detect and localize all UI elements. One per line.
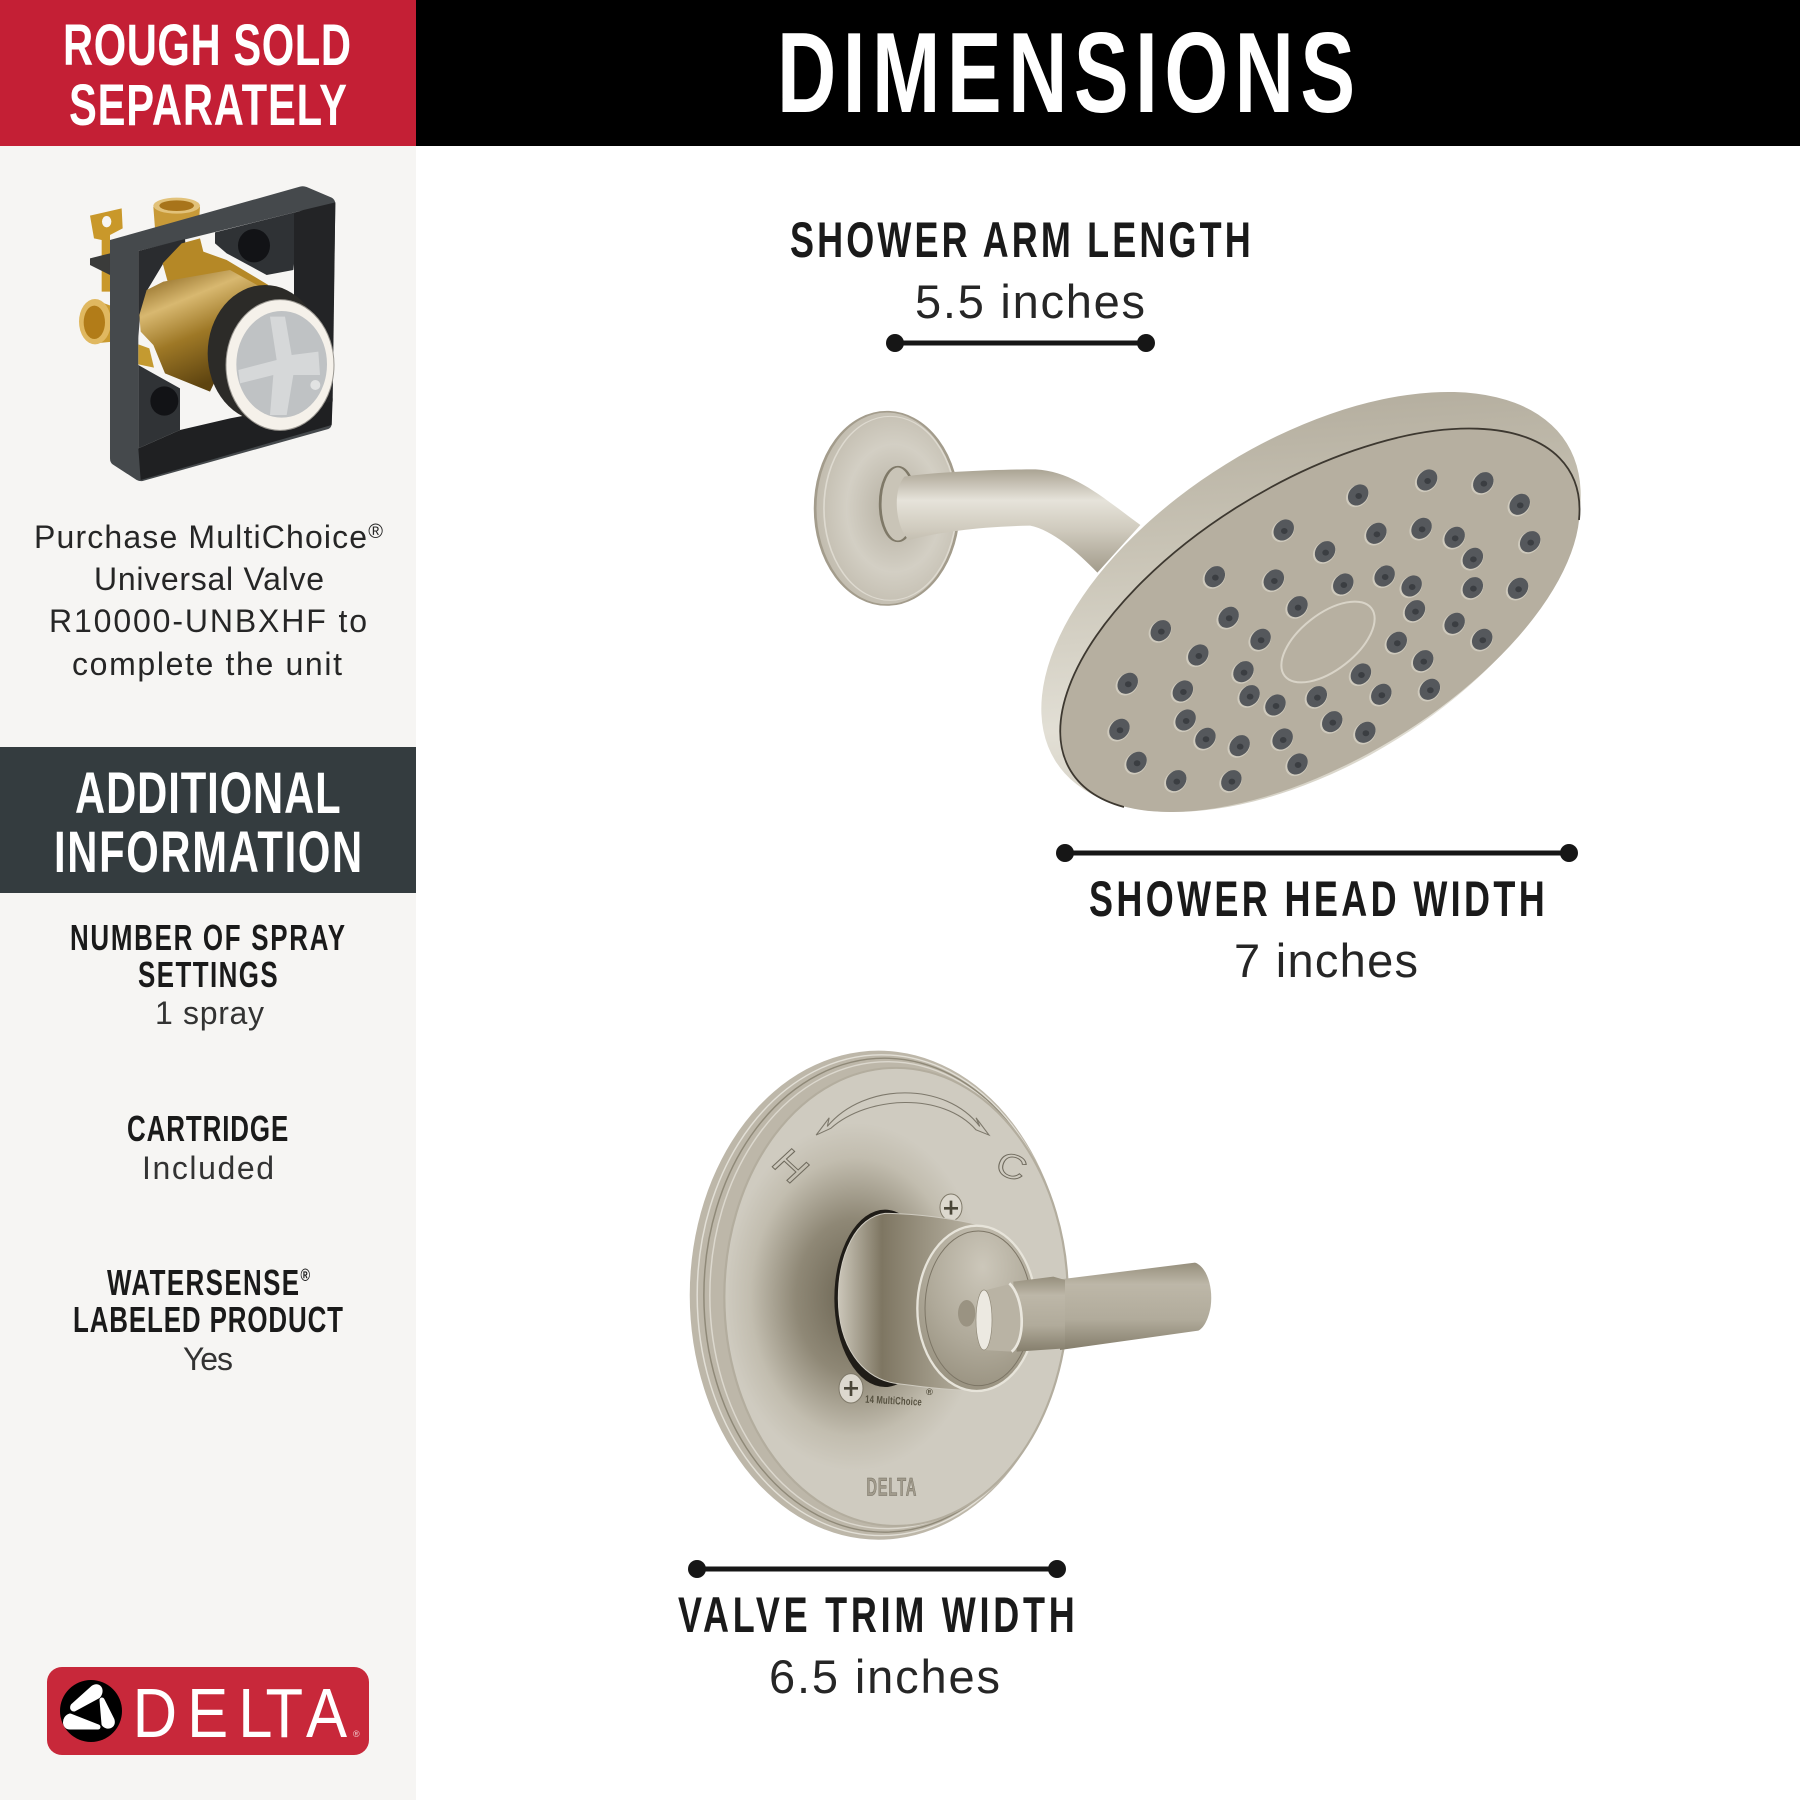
- spec: watersense: Yes: [183, 1341, 233, 1377]
- banner: rough sold separately: [0, 0, 416, 146]
- text: purchase multichoice note: Universal Valve: [94, 561, 324, 597]
- top screw: [940, 1194, 962, 1221]
- upper mounting block: [215, 211, 300, 275]
- spec: watersense: WATERSENSE: [107, 1263, 299, 1303]
- banner: additional information: INFORMATION: [54, 819, 362, 885]
- right wall: [294, 202, 335, 408]
- banner: additional information: [0, 747, 416, 893]
- bottom wall: [138, 398, 333, 480]
- title banner: dimensions: [416, 0, 1800, 146]
- cold mark: C: [991, 1144, 1033, 1189]
- spray nozzles: [1105, 468, 1543, 794]
- hub cylinder: [838, 1213, 983, 1391]
- spec: spray settings: 1 spray: [155, 995, 264, 1031]
- text: purchase multichoice note: [34, 519, 383, 682]
- spec: watersense: LABELED PRODUCT: [73, 1300, 343, 1340]
- handle shadow: [958, 1300, 975, 1327]
- measure line: [688, 1560, 1066, 1578]
- banner: additional information: ADDITIONAL: [75, 760, 341, 826]
- mounting bracket: [90, 208, 123, 292]
- plate rim: [690, 1051, 1067, 1540]
- lower brass: [138, 344, 154, 368]
- banner: rough sold separately: ROUGH SOLD: [63, 12, 351, 78]
- face edge line: [1060, 429, 1580, 807]
- measure line: [886, 334, 1155, 352]
- arm tube: [897, 469, 1140, 573]
- top port: [153, 207, 200, 242]
- dark cartridge collar: [208, 285, 322, 422]
- image: rough valve: [79, 186, 335, 481]
- frame opening: [138, 211, 300, 448]
- brass body: [139, 270, 260, 392]
- dimension: shower arm length: [790, 213, 1251, 352]
- logo: delta: [47, 1667, 369, 1755]
- handle cap: [917, 1226, 1036, 1391]
- centre ring: [1267, 586, 1389, 698]
- spec: cartridge: Included: [142, 1150, 274, 1186]
- plate face: [724, 1068, 1068, 1526]
- cover cross: [238, 317, 320, 415]
- spec: spray settings: SETTINGS: [138, 955, 278, 995]
- lever neck: [980, 1284, 1022, 1352]
- dimension: shower arm length: 5.5 inches: [915, 275, 1145, 328]
- arm collar: [880, 467, 915, 541]
- dimension: shower head width: [1056, 844, 1578, 987]
- trim plate: [690, 1051, 1068, 1540]
- lower mounting block: [138, 365, 180, 448]
- spec: spray settings: [70, 918, 345, 1031]
- panel: sidebar: [0, 146, 416, 1800]
- banner: rough sold separately: SEPARATELY: [69, 72, 347, 138]
- hot mark: H: [763, 1141, 818, 1191]
- neck ring: [1009, 1283, 1022, 1352]
- dimension: shower head width: SHOWER HEAD WIDTH: [1089, 872, 1545, 927]
- spec: spray settings: NUMBER OF SPRAY: [70, 918, 345, 958]
- lever mid section: [1013, 1277, 1065, 1352]
- lever: [1060, 1263, 1211, 1350]
- frame: [110, 186, 335, 481]
- left port: [95, 300, 113, 343]
- image: valve trim: [690, 1051, 1211, 1540]
- bottom screw: [839, 1374, 863, 1403]
- title banner: dimensions: DIMENSIONS: [777, 10, 1355, 137]
- spec: cartridge: [127, 1109, 288, 1186]
- dimension: valve trim width: [678, 1560, 1075, 1703]
- text: purchase multichoice note: complete the unit: [72, 646, 342, 682]
- image: shower arm and flange: [815, 412, 1140, 605]
- measure line: [1056, 844, 1578, 862]
- cover knob: [310, 380, 320, 390]
- hub shadow ring: [834, 1210, 936, 1387]
- wall flange: [815, 412, 958, 605]
- spec: watersense: ®: [300, 1266, 310, 1286]
- text: purchase multichoice note: ®: [368, 521, 383, 543]
- registered mark: ®: [926, 1387, 933, 1397]
- dimension: valve trim width: VALVE TRIM WIDTH: [678, 1588, 1075, 1643]
- cover: [236, 311, 327, 418]
- chrome ring: [226, 300, 334, 430]
- spec: watersense: [73, 1263, 343, 1377]
- text: purchase multichoice note: R10000-UNBXHF to: [49, 603, 367, 639]
- image: shower head: [970, 306, 1652, 898]
- head face: [998, 350, 1642, 890]
- logo: delta: DELTA: [133, 1673, 347, 1752]
- handle assembly: [834, 1194, 1211, 1408]
- head rim: [970, 306, 1652, 898]
- brass casting: [163, 238, 268, 295]
- lever tab: [976, 1290, 992, 1350]
- logo: delta: ®: [353, 1729, 360, 1739]
- left inner wall: [138, 239, 187, 338]
- temperature arrow: [816, 1093, 989, 1135]
- delta engraving: DELTA: [866, 1475, 917, 1502]
- dimension: shower arm length: SHOWER ARM LENGTH: [790, 213, 1251, 268]
- dimension: valve trim width: 6.5 inches: [769, 1650, 1000, 1703]
- text: purchase multichoice note: Purchase MultiChoice: [34, 519, 367, 555]
- model engraving: 14 MultiChoice: [865, 1393, 922, 1408]
- dimension: shower head width: 7 inches: [1234, 934, 1418, 987]
- spec: cartridge: CARTRIDGE: [127, 1109, 288, 1149]
